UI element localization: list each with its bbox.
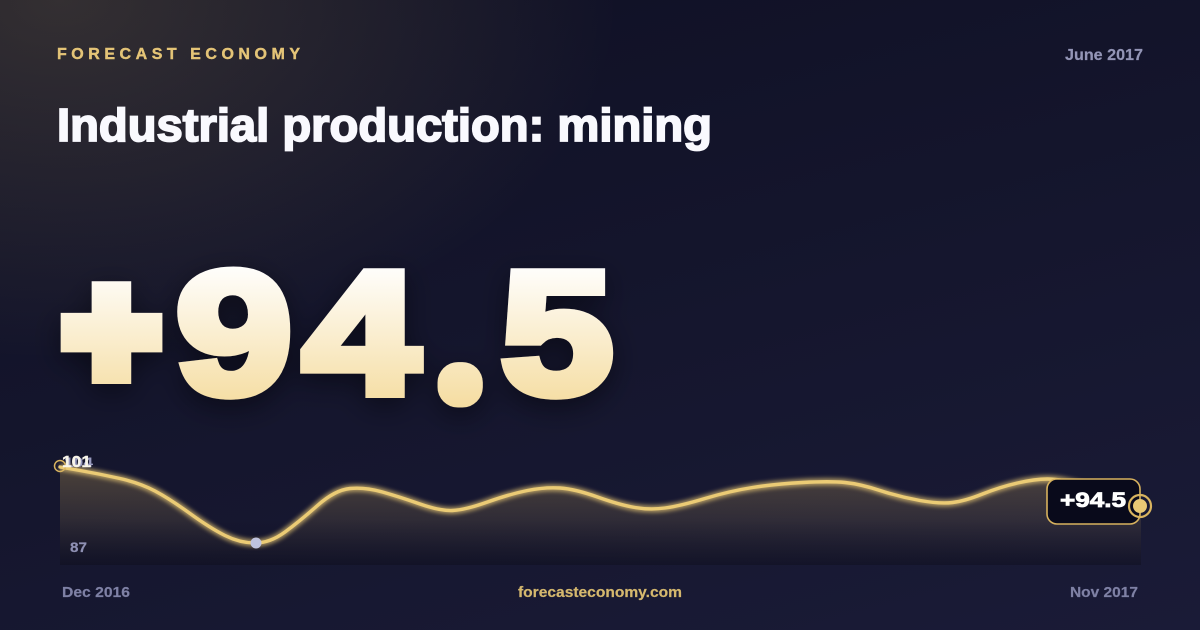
data line [60, 467, 1141, 543]
end date: Nov 2017 [1070, 585, 1138, 601]
sparkline chart [54, 454, 1151, 565]
date: June 2017 [1065, 47, 1143, 64]
headline value: . [456, 361, 464, 394]
line glow [60, 467, 1141, 543]
current value callout [1047, 479, 1140, 524]
headline value: 9 [176, 235, 292, 430]
end point marker [1129, 495, 1151, 517]
brand name: FORECAST ECONOMY [57, 46, 300, 63]
min label: 87 [70, 540, 87, 555]
headline value: 5 [501, 235, 613, 430]
headline value [65, 235, 613, 430]
start date: Dec 2016 [62, 585, 130, 601]
current value callout: +94.5 [1060, 489, 1126, 512]
start point marker [54, 460, 66, 472]
title: Industrial production: mining [57, 99, 712, 151]
headline value: + [65, 242, 158, 420]
min point marker [250, 538, 262, 548]
website: forecasteconomy.com [518, 585, 682, 601]
chart area fill [60, 467, 1141, 565]
max label shadow: 104 [64, 454, 93, 470]
max label: 101 [62, 454, 91, 471]
headline value: 4 [303, 235, 419, 430]
